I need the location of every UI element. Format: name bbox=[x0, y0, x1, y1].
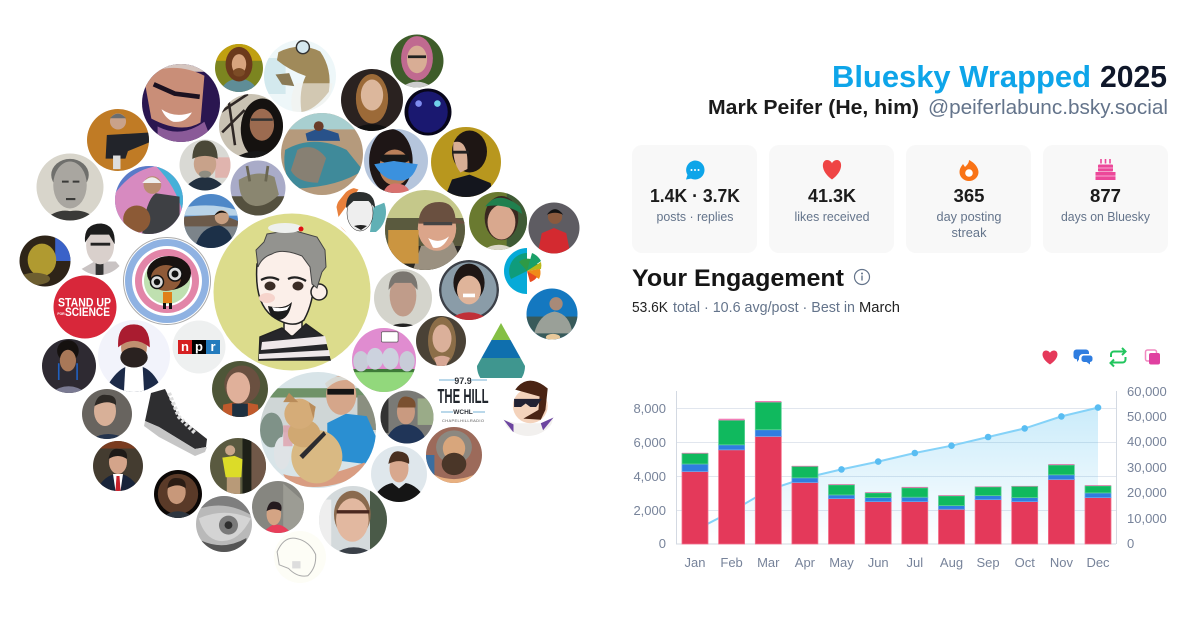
avatar: Stand Up for Science logo: SCIENCE bbox=[65, 307, 110, 319]
right axis labels: 0 bbox=[1127, 536, 1134, 551]
title: Bluesky Wrapped bbox=[832, 59, 1091, 94]
avatar: green and blue radial logo bbox=[504, 248, 541, 294]
avatar: engraved eye bbox=[196, 496, 252, 552]
avatar: man under blue sky bbox=[184, 194, 238, 248]
avatar: man on orange background bbox=[87, 109, 149, 171]
avatar: triceratops sculpture bbox=[230, 160, 286, 216]
card: days on Bluesky bbox=[1043, 145, 1168, 253]
avatar: sketch of dragon bbox=[274, 531, 326, 583]
icon: quotes squares bbox=[1146, 350, 1160, 364]
logo: The Hill radio: CHAPELHILLRADIO bbox=[442, 418, 484, 423]
icon: likes heart bbox=[1043, 350, 1057, 364]
panel: stat cards bbox=[632, 145, 1168, 253]
user name and handle: @peiferlabunc.bsky.social bbox=[928, 97, 1168, 119]
avatar: woman with curly brown hair bbox=[212, 361, 268, 417]
card: days on Bluesky: 877 bbox=[1090, 186, 1121, 206]
card: posts and replies: 1.4K · 3.7K bbox=[650, 186, 740, 206]
right axis labels: 60,000 bbox=[1127, 384, 1167, 399]
card: posting streak: day posting bbox=[936, 210, 1002, 224]
month labels bbox=[685, 555, 1110, 570]
panel: avatar bubble cluster bbox=[20, 34, 580, 583]
month labels: Jul bbox=[906, 555, 923, 570]
avatar: smiling person in red shirt bbox=[439, 260, 499, 320]
month labels: Sep bbox=[977, 555, 1000, 570]
month labels: Aug bbox=[940, 555, 963, 570]
card: likes received: likes received bbox=[794, 210, 870, 224]
month labels: Mar bbox=[757, 555, 780, 570]
card: posting streak: 365 bbox=[954, 186, 984, 206]
icon: black high-top sneaker bbox=[144, 389, 207, 456]
avatar: NPR logo: p bbox=[195, 339, 203, 354]
user name and handle: Mark Peifer (He, him) bbox=[708, 97, 919, 119]
month labels: May bbox=[829, 555, 854, 570]
avatar: NPR logo: r bbox=[210, 339, 216, 354]
engagement summary bbox=[632, 300, 900, 316]
avatar: cartoon face illustration bbox=[336, 188, 386, 232]
avatar: Stand Up for Science logo bbox=[54, 276, 116, 338]
avatar: hiker in yellow vest bbox=[210, 438, 266, 494]
left axis labels: 4,000 bbox=[633, 469, 666, 484]
avatar: woman with green cap bbox=[469, 192, 527, 250]
icon: replies bubbles bbox=[1074, 350, 1092, 364]
cumulative area bbox=[695, 408, 1098, 544]
heading: Your Engagement: Your Engagement bbox=[632, 265, 844, 292]
avatar: cartoon woman with blue mask bbox=[364, 129, 428, 193]
right axis labels: 40,000 bbox=[1127, 434, 1167, 449]
month labels: Oct bbox=[1015, 555, 1035, 570]
user name and handle bbox=[708, 97, 1168, 119]
right axis labels: 10,000 bbox=[1127, 511, 1167, 526]
avatar: woman with pink hair bbox=[390, 34, 444, 88]
engagement summary: March bbox=[859, 300, 900, 316]
engagement summary: 53.6K bbox=[632, 300, 668, 316]
left axis labels: 2,000 bbox=[633, 503, 666, 518]
right axis labels: 50,000 bbox=[1127, 409, 1167, 424]
engagement summary: total · 10.6 avg/post · Best in bbox=[673, 300, 855, 316]
avatar: bearded mascot bbox=[426, 427, 482, 483]
avatar: woman on dark background with blue earrings bbox=[42, 339, 96, 393]
avatar: NPR logo bbox=[172, 320, 226, 374]
avatar: main cartoon profile bbox=[214, 214, 370, 370]
month labels: Nov bbox=[1050, 555, 1073, 570]
avatar: gray-haired man bbox=[374, 269, 432, 327]
avatar: cartoon scientist with sunglasses bbox=[504, 380, 554, 436]
avatar: man with red tie bbox=[93, 441, 143, 491]
logo: The Hill radio bbox=[438, 376, 488, 423]
logo: The Hill radio: WCHL bbox=[453, 409, 473, 416]
avatar: dinosaur illustration bbox=[264, 40, 336, 112]
avatar: man in dark circle bbox=[154, 470, 202, 518]
avatar: pink cartoon penguins bbox=[352, 328, 416, 392]
avatar: woman on colorful sculpture bbox=[281, 113, 363, 195]
card: posting streak: streak bbox=[952, 226, 987, 240]
logo: The Hill radio: 97.9 bbox=[454, 376, 472, 386]
chart legend icons bbox=[1043, 348, 1160, 366]
avatar: woman with curly dark hair and glasses bbox=[219, 94, 284, 160]
right axis labels: 30,000 bbox=[1127, 460, 1167, 475]
avatar: Stand Up for Science logo: STAND UP bbox=[58, 298, 111, 310]
month labels: Dec bbox=[1086, 555, 1110, 570]
avatar: woman with long light-brown hair bbox=[416, 316, 466, 366]
avatar: woman in red jacket bbox=[528, 202, 580, 254]
cumulative line bbox=[695, 404, 1101, 530]
card: posting streak bbox=[906, 145, 1031, 253]
avatar: woman with bob in yellow foliage bbox=[431, 127, 501, 197]
avatar: grayscale man portrait bbox=[36, 154, 104, 220]
avatar: blonde woman on dark background bbox=[341, 69, 403, 131]
avatar: man in black t-shirt bbox=[371, 446, 427, 502]
avatar: man on stairs in red shirt bbox=[252, 481, 304, 533]
month labels: Jun bbox=[868, 555, 889, 570]
card: posts and replies bbox=[632, 145, 757, 253]
avatar: man in navy sweater bbox=[380, 390, 434, 444]
avatar: smiling man with glasses, purple tone bbox=[142, 64, 220, 142]
month labels: Feb bbox=[720, 555, 743, 570]
right axis labels bbox=[1127, 384, 1167, 551]
avatar: golden face statue bbox=[20, 236, 70, 286]
left axis labels: 8,000 bbox=[633, 401, 666, 416]
avatar: man with dog bbox=[260, 372, 377, 488]
logo: The Hill radio: THE HILL bbox=[438, 386, 488, 408]
card: posts and replies: posts · replies bbox=[656, 210, 734, 224]
avatar: man with dog on colorful background bbox=[115, 166, 183, 234]
avatar: man in gray at a stadium bbox=[526, 288, 578, 341]
avatar: cartoon girl with concentric rings bbox=[124, 238, 210, 324]
icon: reposts arrows bbox=[1110, 348, 1126, 366]
avatar: man in beanie bbox=[180, 140, 230, 190]
avatar: Stand Up for Science logo: FOR bbox=[57, 312, 65, 316]
icon: info bbox=[854, 270, 870, 284]
month labels: Apr bbox=[795, 555, 816, 570]
avatar: smiling man with beer bbox=[385, 190, 469, 270]
avatar: man in gray portrait bbox=[82, 389, 132, 439]
card: likes received bbox=[769, 145, 894, 253]
stacked bars bbox=[682, 401, 1111, 544]
left axis labels bbox=[633, 401, 666, 551]
avatar: woman with glasses and short hair bbox=[319, 486, 387, 554]
avatar: long-haired man bbox=[215, 44, 263, 92]
right axis labels: 20,000 bbox=[1127, 485, 1167, 500]
avatar: blue fluorescent microscopy image bbox=[404, 88, 452, 136]
left axis labels: 6,000 bbox=[633, 435, 666, 450]
avatar: man with red turban bbox=[98, 320, 170, 392]
avatar: engraved portrait of man with glasses bbox=[82, 224, 120, 275]
card: days on Bluesky: days on Bluesky bbox=[1061, 210, 1151, 224]
left axis labels: 0 bbox=[659, 536, 666, 551]
avatar: pyramid logo bbox=[476, 322, 526, 378]
title: 2025 bbox=[1100, 59, 1167, 94]
panel: profile header bbox=[708, 59, 1168, 119]
month labels: Jan bbox=[685, 555, 705, 570]
avatar: NPR logo: n bbox=[181, 339, 189, 354]
card: likes received: 41.3K bbox=[808, 186, 856, 206]
chart: monthly engagement bbox=[633, 384, 1167, 570]
